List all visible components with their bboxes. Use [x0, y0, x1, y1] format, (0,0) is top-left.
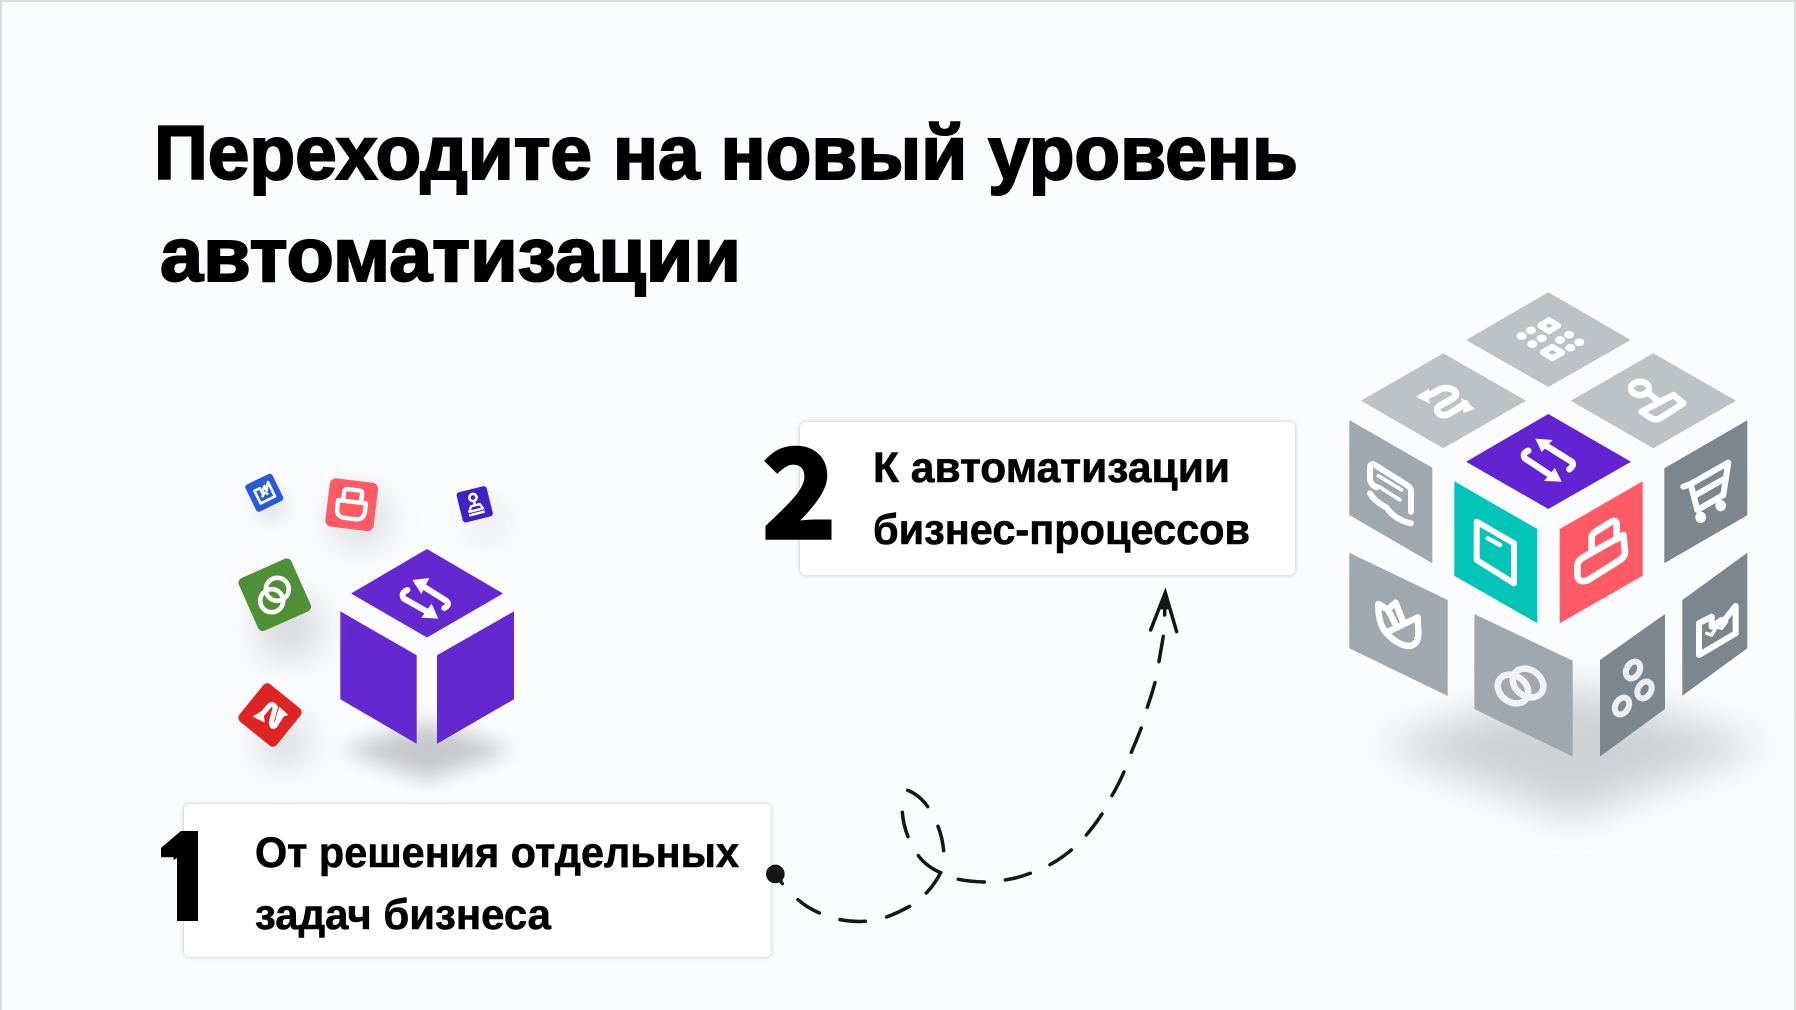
illustration: small purple cube with scattered tiles [236, 473, 515, 780]
tile: top-right stamp [1571, 353, 1736, 448]
text: card 2: К автоматизации [873, 444, 1230, 492]
text: card 2: бизнес-процессов [873, 506, 1250, 554]
cube: small purple [340, 549, 514, 744]
tile: centre teal [1454, 481, 1537, 623]
number 1: 1 [149, 776, 225, 957]
tile: indigo stamp [456, 486, 504, 537]
text: card 1 [255, 829, 739, 939]
tile: right cart [1664, 420, 1747, 563]
card 1 [161, 802, 774, 960]
tile: right factory [1682, 553, 1747, 696]
title: автоматизации [160, 213, 741, 298]
text: card 2 [873, 444, 1250, 554]
tile: red arrows [236, 681, 306, 764]
title: Переходите на новый уровень [154, 111, 1298, 196]
tile: top-left arrows [1361, 353, 1526, 448]
tile: lower-left flower [1349, 553, 1448, 696]
illustration: large cube of tiles [1349, 292, 1768, 818]
tile: blue factory [244, 473, 286, 520]
text: card 1: От решения отдельных [255, 829, 739, 877]
tile: centre purple [1466, 414, 1631, 509]
tile: green rings [237, 557, 318, 656]
shadow: large cube [1375, 685, 1768, 818]
tile: lower-middle rings [1474, 614, 1573, 756]
tile: lower-right circles [1600, 614, 1665, 756]
text: card 1: задач бизнеса [255, 891, 552, 939]
tile: red lock [325, 478, 385, 543]
tile: left bubble [1349, 420, 1432, 563]
arrow: dashed curve from card 1 to card 2 [766, 591, 1177, 921]
shadow: small cube [340, 722, 515, 780]
tile: centre red [1560, 481, 1643, 623]
card 2 [761, 394, 1295, 575]
tile: top keypad [1466, 292, 1631, 387]
number 2: 2 [761, 394, 837, 575]
title [154, 111, 1298, 298]
